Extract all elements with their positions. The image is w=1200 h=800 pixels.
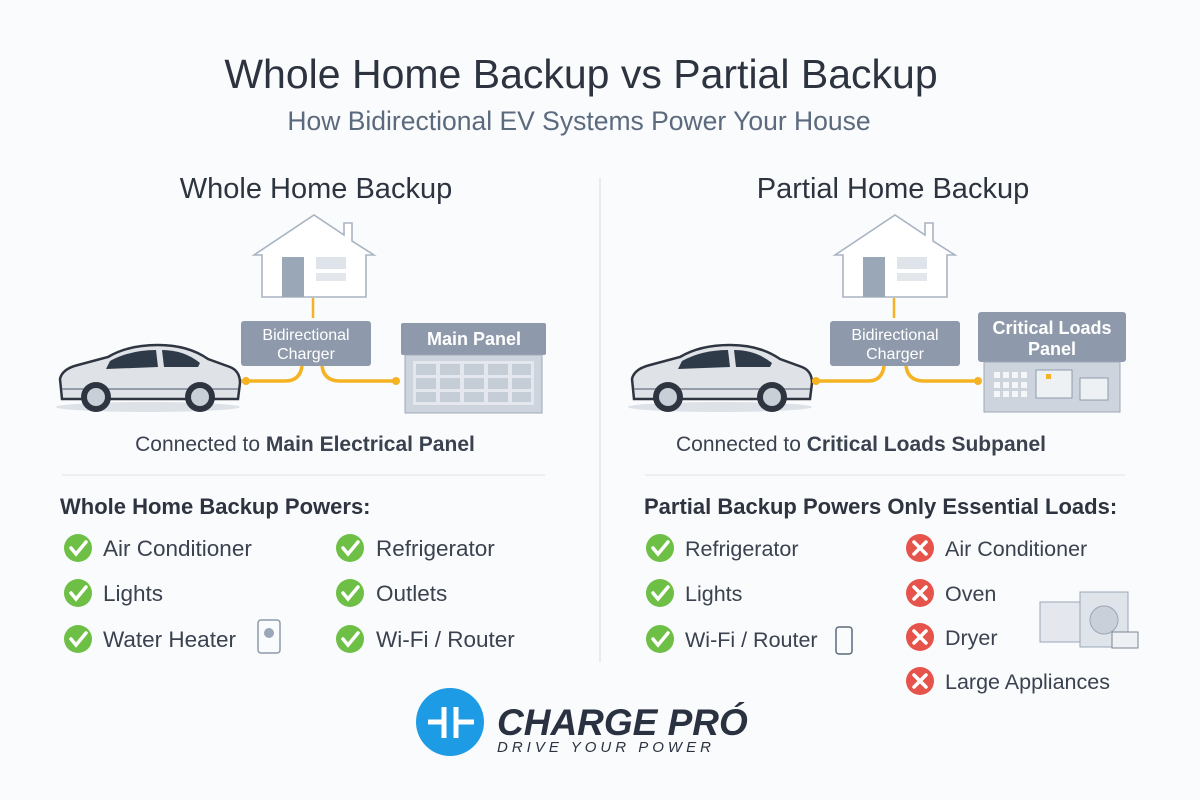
icon: appliances: [1040, 592, 1138, 648]
list items: Dryer: [945, 626, 998, 650]
critical loads panel: Panel: [1028, 339, 1076, 359]
list items: Water Heater: [103, 627, 236, 652]
panel: partial home backup: [628, 173, 1138, 695]
list items: Lights: [103, 581, 163, 606]
logo: DRIVE YOUR POWER: [497, 739, 715, 756]
list heading: Whole Home Backup Powers:: [60, 494, 371, 519]
logo: [416, 688, 748, 756]
cables: [812, 366, 978, 381]
icon: house: [835, 215, 955, 297]
list heading: Partial Backup Powers Only Essential Loads:: [644, 494, 1117, 519]
logo: CHARGE PRÓ: [497, 702, 748, 743]
charger box: [241, 321, 371, 366]
subtitle: How Bidirectional EV Systems Power Your House: [287, 106, 871, 136]
list items: Wi-Fi / Router: [685, 628, 818, 652]
cables: [241, 366, 398, 381]
title: Whole Home Backup vs Partial Backup: [224, 51, 938, 97]
icon: house: [254, 215, 374, 297]
list items: Large Appliances: [945, 670, 1110, 694]
charger box: Bidirectional: [851, 327, 939, 344]
caption: Connected to Critical Loads Subpanel: [676, 433, 1046, 456]
list items: Wi-Fi / Router: [376, 627, 515, 652]
list items: [64, 534, 515, 653]
panel: whole home backup: [56, 173, 546, 653]
list items: [646, 534, 1138, 695]
list items: Refrigerator: [376, 536, 495, 561]
main panel: [401, 323, 546, 413]
arrow: house to charger: [312, 298, 314, 318]
charger box: [830, 321, 960, 366]
list items: Air Conditioner: [945, 537, 1087, 561]
charger box: Bidirectional: [262, 327, 350, 344]
list items: Lights: [685, 582, 742, 606]
list items: Oven: [945, 582, 996, 606]
heading: partial home backup: Partial Home Backup: [757, 173, 1029, 205]
list items: Refrigerator: [685, 537, 799, 561]
icon: car: [56, 345, 240, 412]
arrow: [893, 298, 895, 318]
main panel: Main Panel: [427, 329, 521, 349]
list items: Air Conditioner: [103, 536, 252, 561]
caption: Connected to Main Electrical Panel: [135, 433, 475, 456]
charger box: Charger: [277, 346, 336, 363]
charger box: Charger: [866, 346, 925, 363]
critical loads panel: [978, 312, 1126, 412]
icon: car: [628, 345, 812, 412]
heading: whole home backup: Whole Home Backup: [180, 173, 452, 205]
critical loads panel: Critical Loads: [992, 318, 1112, 338]
list items: Outlets: [376, 581, 447, 606]
